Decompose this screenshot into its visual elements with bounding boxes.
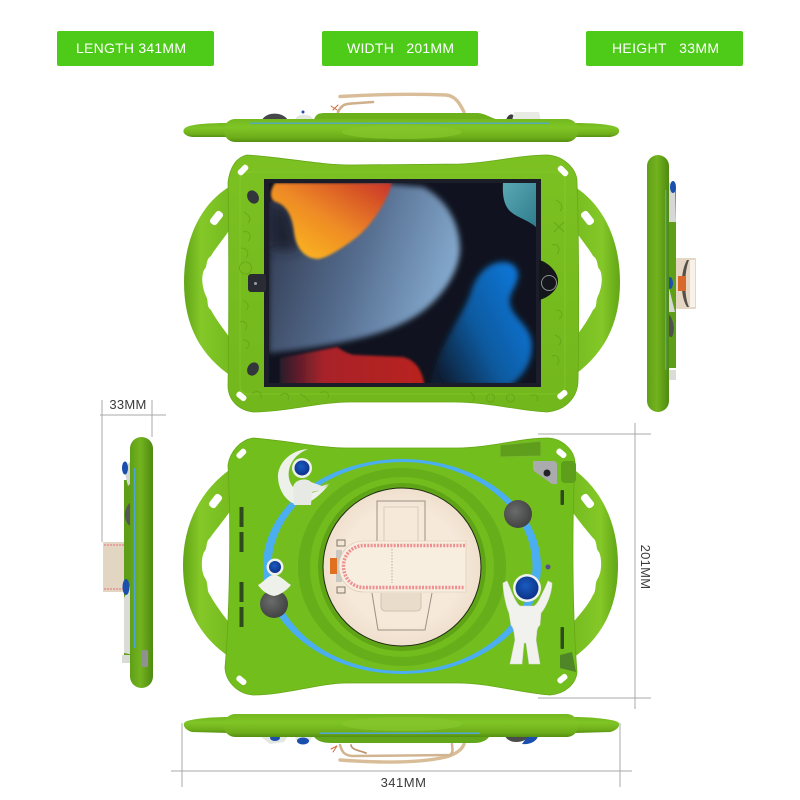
wing right xyxy=(575,717,619,733)
carry strap rope, bottom view xyxy=(331,744,464,762)
arms, torso and legs xyxy=(503,581,552,664)
badge: width 201mm xyxy=(322,31,478,66)
planet xyxy=(260,590,288,618)
case body, front xyxy=(228,155,579,412)
left handle, back xyxy=(183,468,240,660)
badge: width 201mm: WIDTH 201MM xyxy=(347,40,454,56)
dimension: 33mm xyxy=(100,397,166,542)
astronaut helmet xyxy=(266,558,284,576)
orange tab xyxy=(330,558,337,574)
screw-like dark ovals xyxy=(245,188,261,378)
bottom edge view of the case xyxy=(184,714,619,762)
back disc, left side xyxy=(124,480,134,657)
astronaut and planet bits, left side xyxy=(122,460,134,663)
strap, right side xyxy=(676,258,696,309)
home button xyxy=(542,276,556,290)
lower right corner notch xyxy=(560,652,576,672)
wallpaper: teal blob xyxy=(503,183,536,227)
right hand hole xyxy=(571,510,601,624)
rotating disc rim xyxy=(314,113,498,120)
strap, left side xyxy=(103,542,124,592)
astronaut body and arm xyxy=(293,479,328,505)
charging corner block xyxy=(561,461,576,483)
dimension: 341mm: 341MM xyxy=(381,775,426,790)
notch right, home button xyxy=(539,260,558,300)
left handle, front xyxy=(184,184,240,378)
hand strap xyxy=(330,540,466,593)
back view of the tablet case xyxy=(183,438,618,695)
planet, upper right xyxy=(504,500,532,528)
handle slots, front xyxy=(209,210,595,226)
front camera dot xyxy=(254,282,257,285)
left hand hole xyxy=(202,226,232,341)
astronaut parts below the bottom edge xyxy=(260,735,538,744)
orange tab xyxy=(678,276,686,291)
right hand hole xyxy=(572,226,602,341)
astronaut helmet xyxy=(513,574,541,602)
speaker slots and side grilles xyxy=(240,490,564,649)
astronaut bits, right side xyxy=(666,178,676,380)
left hand hole xyxy=(202,510,231,624)
blue orbit ring xyxy=(263,459,541,674)
case body, back xyxy=(225,438,577,695)
standing astronaut xyxy=(503,574,552,664)
astronaut body xyxy=(258,575,291,596)
wallpaper: blue blob xyxy=(430,262,532,386)
side bar xyxy=(224,119,578,142)
dimension: 201mm xyxy=(538,423,653,709)
badge: height 33mm xyxy=(586,31,743,66)
pencil holder slot xyxy=(500,441,541,457)
astronaut parts peeking above the top edge xyxy=(262,110,541,121)
stitching xyxy=(344,546,465,588)
embossed doodles on the bezel xyxy=(240,200,564,402)
camera bracket xyxy=(533,461,557,484)
screen bezel xyxy=(264,179,541,387)
carry strap rope, top view xyxy=(331,94,464,112)
notch left, camera xyxy=(248,274,266,292)
wing left xyxy=(183,123,230,137)
right handle, back xyxy=(560,468,618,660)
astronaut helmet xyxy=(292,458,312,478)
rotating disc rim xyxy=(313,735,490,743)
top edge view of the case xyxy=(183,94,619,142)
camera bump, left side xyxy=(141,650,148,667)
right handle, front xyxy=(560,184,620,378)
crescent moon xyxy=(278,449,330,505)
side pill, left xyxy=(130,437,153,688)
right side view of the case xyxy=(647,155,696,412)
wing right xyxy=(575,123,619,137)
wallpaper: red blob xyxy=(279,346,426,383)
badge: height 33mm: HEIGHT 33MM xyxy=(612,40,719,56)
side bar xyxy=(224,714,578,737)
corner slots, back xyxy=(235,447,569,686)
dimension: 201mm: 201MM xyxy=(638,545,653,589)
moon with astronaut xyxy=(278,449,330,505)
raised bezel frame around the screen xyxy=(240,172,565,394)
wallpaper: dark shadow spot xyxy=(269,205,300,250)
wing left xyxy=(184,717,230,733)
meditating astronaut on a planet xyxy=(258,558,291,618)
folding stand outline xyxy=(372,501,432,630)
handle slots, back xyxy=(208,493,595,509)
green ring around the disc xyxy=(298,468,506,666)
blue ring line, right xyxy=(665,190,666,370)
beige rotating disc xyxy=(323,488,481,646)
wallpaper: slate wave xyxy=(269,183,460,353)
side grip recess xyxy=(342,717,462,731)
corner slots, front xyxy=(235,164,569,402)
front view of the tablet case xyxy=(184,155,620,412)
back disc, right side xyxy=(666,188,676,368)
left side view of the case xyxy=(103,437,153,688)
dimension: 33mm: 33MM xyxy=(109,397,147,412)
badge: length 341mm xyxy=(57,31,214,66)
badge: length 341mm: LENGTH 341MM xyxy=(76,40,186,56)
wallpaper: orange blob xyxy=(271,183,392,259)
dimension: 341mm xyxy=(171,723,632,790)
side grip recess xyxy=(342,125,462,139)
wallpaper xyxy=(269,183,536,390)
small sensor dot xyxy=(546,564,550,570)
side pill, right xyxy=(647,155,669,412)
